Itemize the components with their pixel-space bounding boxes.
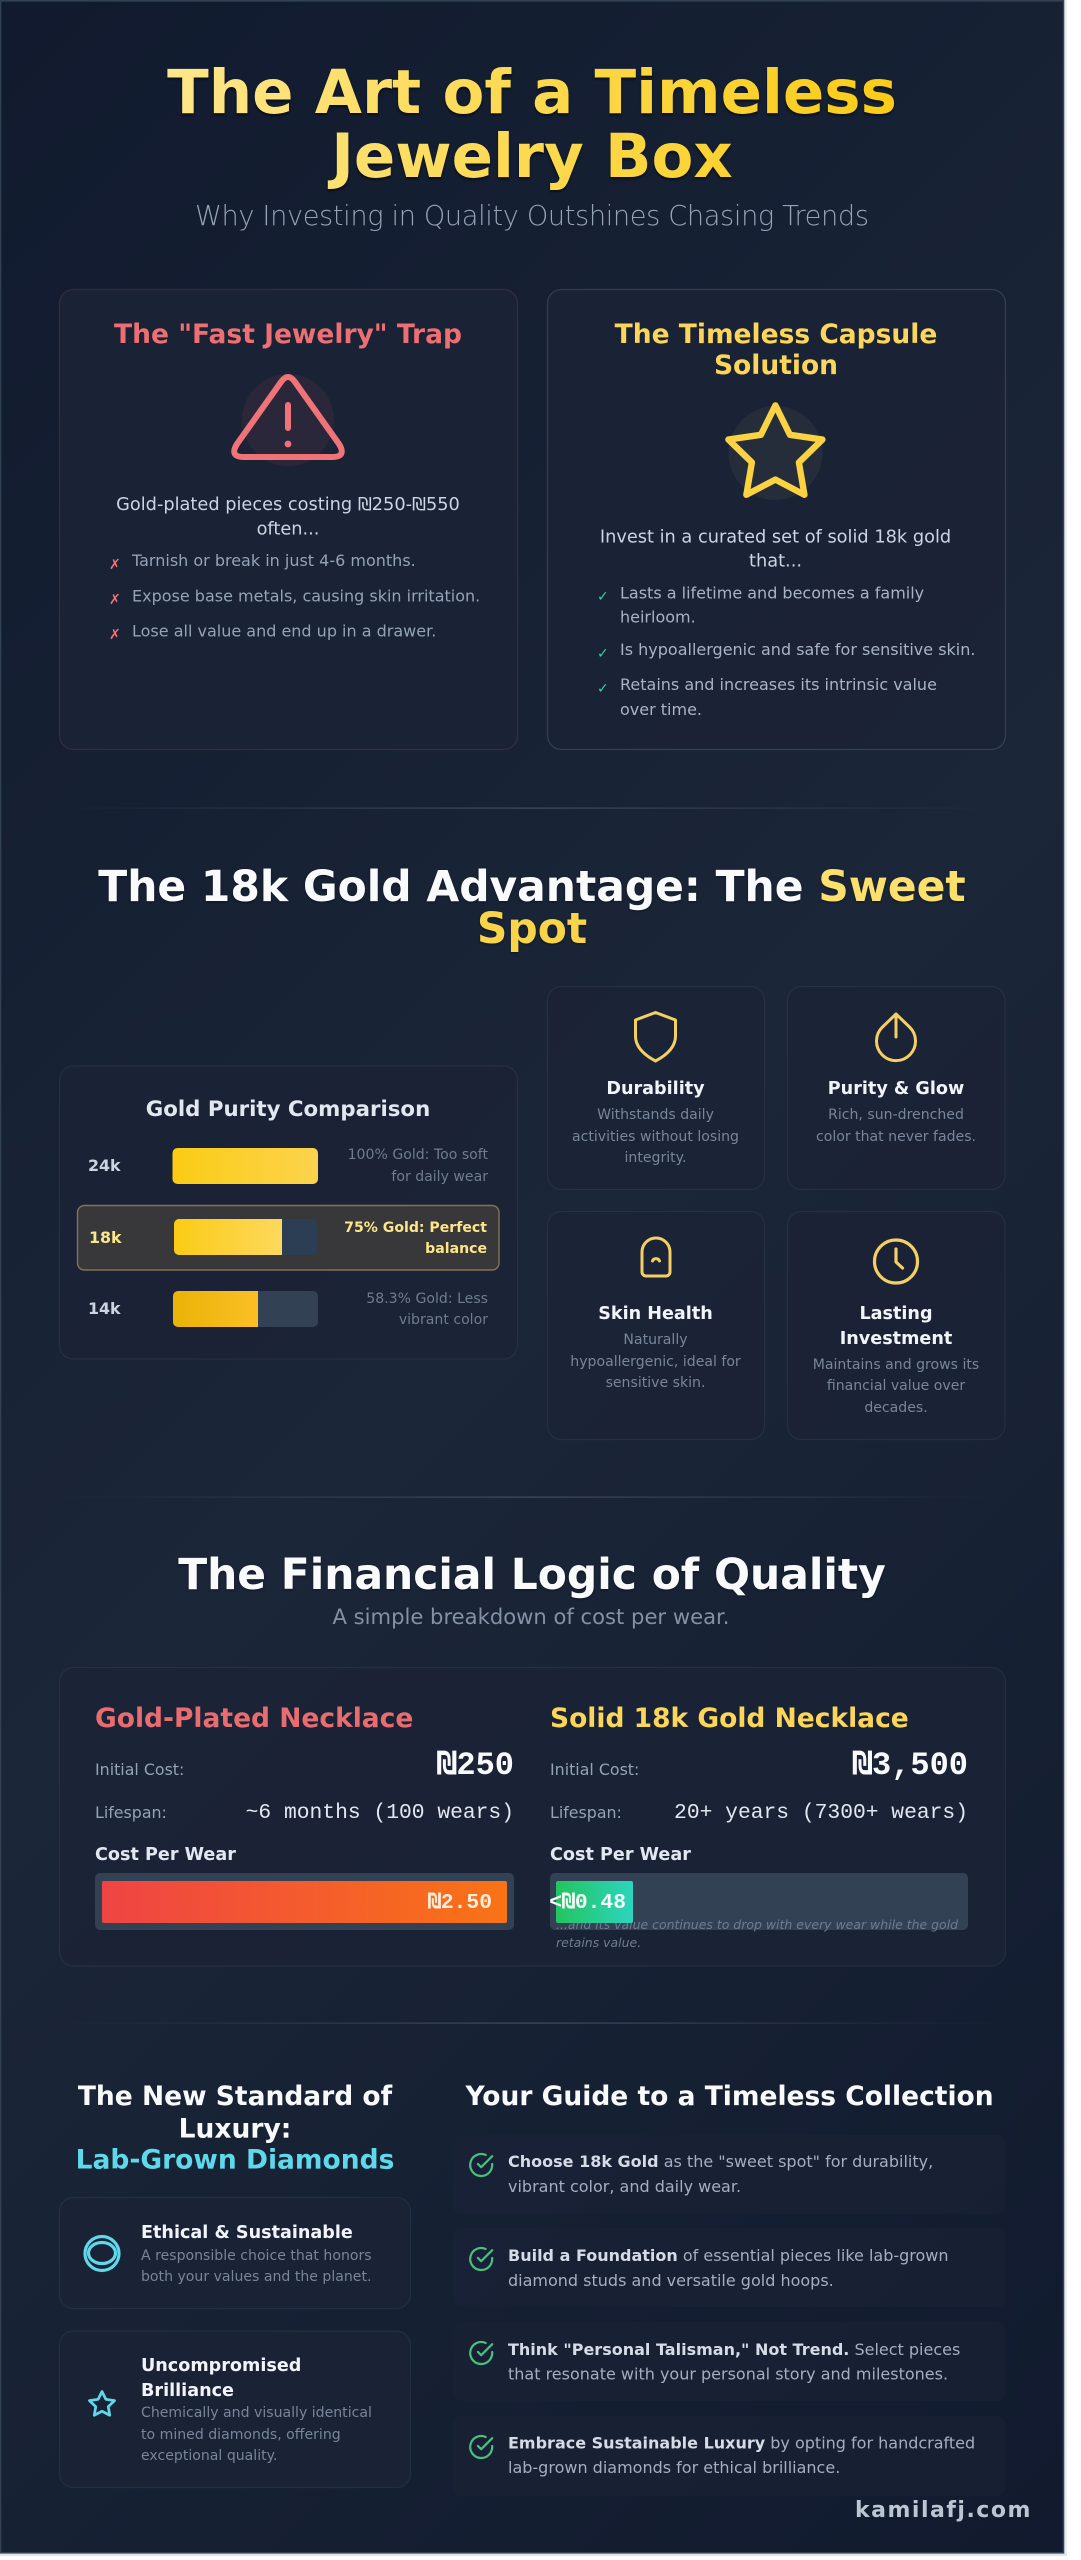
subheading: financial logic: A simple breakdown of cost per wear. xyxy=(333,1604,729,1629)
intro text: solution: Invest in a curated set of solid 18k gold xyxy=(600,528,951,548)
text: sustainable: Embrace Sustainable Luxury by opting for handcrafted xyxy=(508,2434,975,2452)
text: brilliance: to mined diamonds, offering xyxy=(141,2427,341,2443)
text: durability: integrity. xyxy=(625,1150,686,1166)
column: solid 18k necklace: 20+ years (7300+ wears) xyxy=(674,1801,968,1825)
title xyxy=(167,57,897,192)
column: solid 18k necklace xyxy=(549,1703,968,1950)
list: trap problems: Tarnish or break in just 4-6 months. xyxy=(131,551,416,570)
text: purity: color that never fades. xyxy=(816,1129,976,1145)
heading: lab-grown diamonds: Luxury: xyxy=(179,2114,291,2144)
intro text: trap: often... xyxy=(257,520,319,540)
title: Jewelry Box xyxy=(327,121,733,192)
icon: warning triangle xyxy=(234,374,342,466)
column: gold-plated necklace xyxy=(95,1703,514,1930)
row: 14k: 14k xyxy=(88,1299,121,1318)
text: lasting investment xyxy=(813,1304,979,1416)
list: trap problems: Expose base metals, causing skin irritation. xyxy=(132,586,480,606)
intro text: solution: that... xyxy=(749,552,802,572)
text: durability xyxy=(572,1079,739,1166)
title: The Art of a Timeless xyxy=(167,57,897,128)
row: 18k highlighted xyxy=(78,1206,499,1270)
text: lasting investment: decades. xyxy=(864,1400,928,1416)
text: build xyxy=(508,2246,949,2290)
icon: check circle xyxy=(470,2154,492,2176)
column: solid 18k necklace: Cost Per Wear xyxy=(550,1845,691,1865)
list: solution benefits: ✓ xyxy=(597,646,609,662)
column: gold-plated necklace: Initial Cost: xyxy=(95,1760,184,1779)
feature card: skin health xyxy=(548,1212,764,1440)
text: choose: vibrant color, and daily wear. xyxy=(508,2177,741,2196)
card: uncompromised brilliance xyxy=(60,2331,410,2488)
icon: gold star xyxy=(728,405,822,500)
column: solid 18k necklace: Solid 18k Gold Necklace xyxy=(550,1703,909,1734)
column: solid 18k necklace: ₪3,500 xyxy=(853,1744,968,1784)
guide item: sustainable luxury xyxy=(453,2416,1005,2496)
heading: 18k gold advantage xyxy=(98,862,966,953)
text: durability: Durability xyxy=(606,1079,705,1099)
heading: solution xyxy=(615,319,937,381)
intro text: trap: Gold-plated pieces costing ₪250-₪550 xyxy=(116,495,460,515)
text: purity xyxy=(816,1079,976,1145)
bar: solid gold cost per wear xyxy=(549,1873,968,1950)
list: trap problems: Lose all value and end up in a drawer. xyxy=(132,622,436,640)
text: sustainable: lab-grown diamonds for ethical brilliance. xyxy=(508,2458,840,2477)
heading: lab-grown diamonds: Lab-Grown Diamonds xyxy=(76,2144,394,2176)
bar: solid gold cost per wear: ...and its value continues to drop with every wear while the gold xyxy=(556,1917,958,1932)
list: trap problems: ✗ xyxy=(109,557,121,573)
row: 24k: 100% Gold: Too soft xyxy=(348,1147,488,1163)
row: 18k highlighted: 18k xyxy=(89,1228,122,1247)
list: solution benefits: over time. xyxy=(620,700,702,719)
subtitle: Why Investing in Quality Outshines Chasing Trends xyxy=(195,201,869,232)
list: solution benefits: Is hypoallergenic and safe for sensitive skin. xyxy=(620,640,975,659)
row: 14k: 58.3% Gold: Less xyxy=(366,1291,488,1307)
panel: fast jewelry trap xyxy=(60,290,518,750)
intro text: trap xyxy=(116,495,460,540)
icon: small star xyxy=(90,2392,114,2415)
panel: gold purity comparison xyxy=(60,1066,518,1359)
text: ethical xyxy=(141,2223,372,2285)
bar: solid gold cost per wear: <₪0.48 xyxy=(549,1889,626,1915)
guide item: choose 18k gold xyxy=(453,2135,1005,2214)
icon: check circle xyxy=(470,2436,492,2458)
text: skin health: sensitive skin. xyxy=(606,1375,705,1391)
list: trap problems: ✗ xyxy=(109,592,121,608)
row: 18k highlighted: balance xyxy=(425,1241,487,1257)
text: talisman: Think "Personal Talisman," Not Trend. Select pieces xyxy=(508,2340,960,2359)
text: brilliance: Chemically and visually identical xyxy=(141,2405,372,2421)
panel: cost comparison xyxy=(60,1668,1006,1966)
list: solution benefits: heirloom. xyxy=(620,608,696,626)
text: durability: Withstands daily xyxy=(597,1107,714,1123)
text: build: Build a Foundation of essential pieces like lab-grown xyxy=(508,2246,949,2265)
heading: 18k gold advantage: Spot xyxy=(477,904,587,953)
row: 14k xyxy=(88,1291,488,1328)
column: gold-plated necklace: Cost Per Wear xyxy=(95,1845,236,1865)
text: brilliance: exceptional quality. xyxy=(141,2448,277,2464)
heading: financial logic: The Financial Logic of Quality xyxy=(178,1550,886,1599)
row: 24k: for daily wear xyxy=(391,1169,488,1185)
icon: drop xyxy=(877,1014,916,1061)
text: ethical: both your values and the planet. xyxy=(141,2269,371,2285)
heading: 18k gold advantage: The 18k Gold Advantage: The Sweet xyxy=(98,862,966,911)
text: skin health xyxy=(570,1304,741,1391)
chart title: Gold Purity Comparison xyxy=(146,1097,430,1122)
list: solution benefits: ✓ xyxy=(597,681,609,697)
text: talisman xyxy=(508,2340,960,2384)
list: trap problems xyxy=(109,551,480,643)
card: ethical and sustainable xyxy=(60,2198,410,2308)
list: solution benefits: ✓ xyxy=(597,589,609,605)
text: lasting investment: Maintains and grows its xyxy=(813,1357,979,1373)
guide item: build a foundation xyxy=(453,2228,1005,2307)
list: solution benefits: Lasts a lifetime and becomes a family xyxy=(620,584,924,602)
text: purity: Rich, sun-drenched xyxy=(828,1107,964,1123)
text: choose xyxy=(508,2152,933,2196)
column: gold-plated necklace: ₪250 xyxy=(437,1744,514,1784)
text: purity: Purity & Glow xyxy=(828,1079,964,1099)
feature card: durability xyxy=(548,986,764,1190)
feature card: lasting investment xyxy=(788,1212,1005,1440)
text: skin health: Skin Health xyxy=(598,1304,713,1324)
text: skin health: Naturally xyxy=(623,1332,688,1348)
text: lasting investment: financial value over xyxy=(827,1378,965,1394)
text: brilliance: Uncompromised xyxy=(141,2356,301,2376)
bar: gold-plated cost per wear: ₪2.50 xyxy=(428,1889,492,1915)
text: build: diamond studs and versatile gold hoops. xyxy=(508,2271,834,2290)
column: gold-plated necklace: Gold-Plated Necklace xyxy=(95,1703,413,1734)
text: choose: Choose 18k Gold as the "sweet spot" for durability, xyxy=(508,2152,933,2171)
text: talisman: that resonate with your personal story and milestones. xyxy=(508,2364,948,2384)
guide item: personal talisman xyxy=(453,2322,1005,2401)
text: ethical: A responsible choice that honors xyxy=(141,2248,372,2264)
panel: timeless capsule solution xyxy=(548,290,1006,750)
watermark: kamilafj.com xyxy=(855,2498,1032,2523)
list: trap problems: ✗ xyxy=(109,627,121,643)
intro text: solution xyxy=(600,528,951,572)
feature card: purity and glow xyxy=(788,986,1005,1190)
text: skin health: hypoallergenic, ideal for xyxy=(570,1354,741,1370)
list: solution benefits xyxy=(597,584,975,719)
column: gold-plated necklace: Lifespan: xyxy=(95,1803,167,1822)
heading: solution: Solution xyxy=(714,350,838,381)
list: solution benefits: Retains and increases its intrinsic value xyxy=(620,675,937,694)
text: lasting investment: Investment xyxy=(840,1329,952,1349)
icon: clock xyxy=(874,1240,918,1283)
bar: solid gold cost per wear: retains value. xyxy=(556,1935,641,1950)
heading: guide: Your Guide to a Timeless Collection xyxy=(464,2081,994,2112)
row: 18k highlighted: 75% Gold: Perfect xyxy=(344,1220,487,1236)
icon: check circle xyxy=(470,2248,492,2270)
icon: shield xyxy=(636,1012,676,1061)
text: sustainable xyxy=(508,2434,975,2477)
icon: rings xyxy=(85,2236,119,2270)
row: 24k xyxy=(88,1147,488,1185)
icon: check circle xyxy=(470,2342,492,2364)
text: brilliance xyxy=(141,2356,372,2464)
text: durability: activities without losing xyxy=(572,1129,739,1145)
text: ethical: Ethical & Sustainable xyxy=(141,2223,353,2243)
heading: trap: The "Fast Jewelry" Trap xyxy=(114,319,462,350)
row: 24k: 24k xyxy=(88,1156,121,1175)
heading: lab-grown diamonds xyxy=(76,2081,394,2176)
bar: gold-plated cost per wear xyxy=(95,1873,514,1930)
column: solid 18k necklace: Lifespan: xyxy=(550,1803,622,1822)
heading: lab-grown diamonds: The New Standard of xyxy=(78,2081,393,2112)
text: lasting investment: Lasting xyxy=(859,1304,933,1324)
column: gold-plated necklace: ~6 months (100 wears) xyxy=(246,1801,514,1825)
column: solid 18k necklace: Initial Cost: xyxy=(550,1760,639,1779)
icon: arch xyxy=(642,1238,670,1276)
text: brilliance: Brilliance xyxy=(141,2381,234,2401)
heading: solution: The Timeless Capsule xyxy=(615,319,937,350)
row: 14k: vibrant color xyxy=(399,1312,488,1328)
